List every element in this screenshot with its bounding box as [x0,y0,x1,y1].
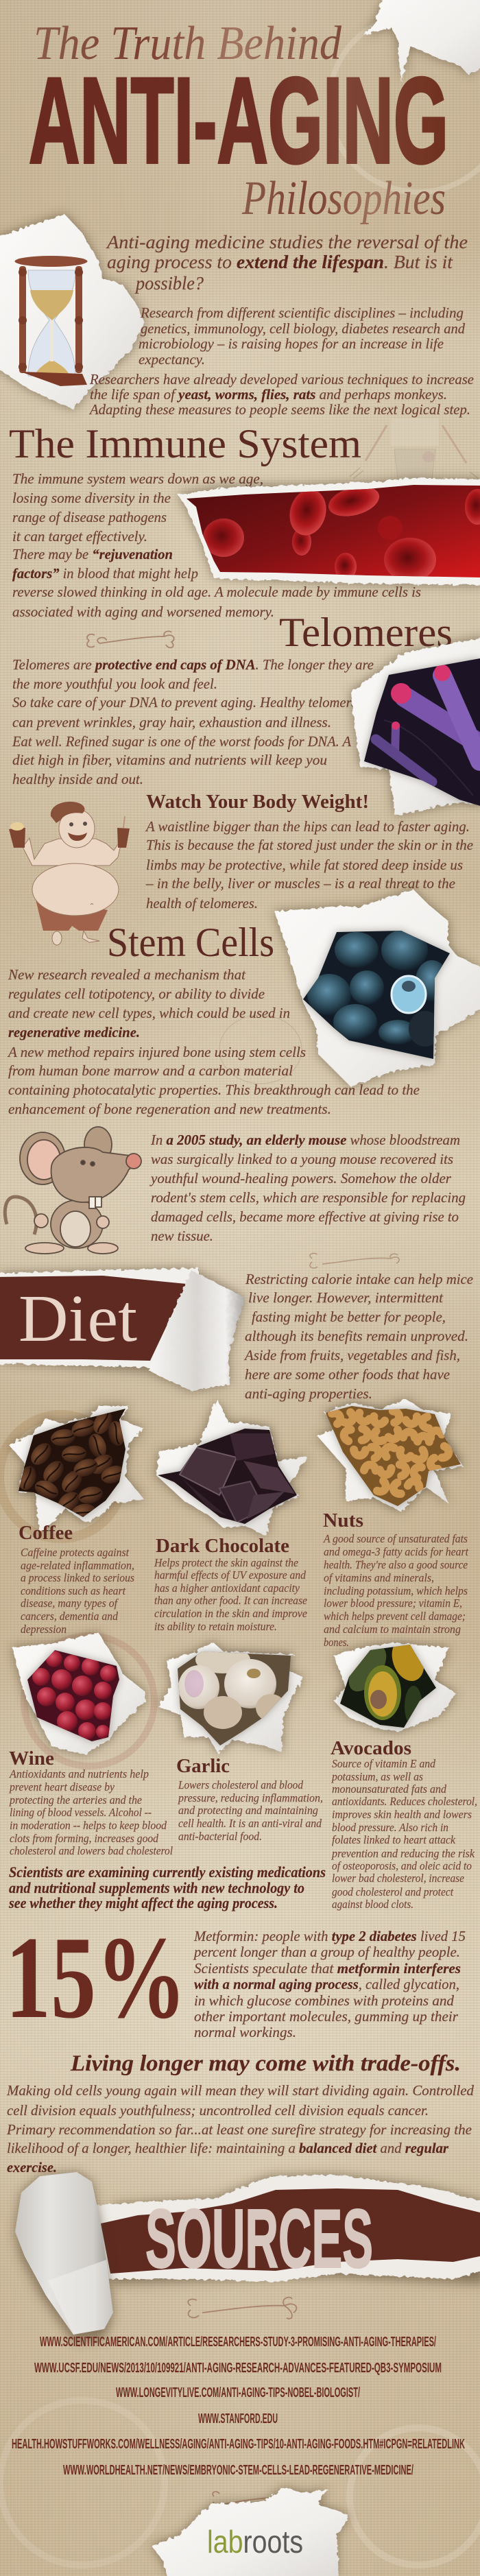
mouse study text: damaged cells, became more effective at giving rise to [151,1208,459,1225]
nuts text: of vitamins and minerals, [324,1571,434,1584]
stem cells text: from human bone marrow and a carbon material [8,1062,293,1079]
photo: dark chocolate [154,1399,308,1536]
panel: nuts [317,1399,469,1649]
diet intro text: fasting might be better for people, [252,1309,446,1325]
trade-offs text: cell division equals youthfulness; uncontrolled cell division equals cancer. [7,2102,429,2119]
avocados text: potassium, as well as [331,1770,423,1783]
stem cells text: containing photocatalytic properties. This breakthrough can lead to the [8,1082,420,1098]
body weight text: health of telomeres. [146,895,258,911]
nuts text: including potassium, which helps [324,1584,468,1597]
nuts text: and omega-3 fatty acids for heart [324,1545,469,1558]
coffee text: disease, many types of [21,1597,119,1610]
heading: Wine: Wine [9,1748,54,1769]
garlic text: and protecting and maintaining [178,1804,318,1817]
avocados text: blood pressure. Also rich in [332,1821,448,1834]
intro lead [106,232,468,294]
mouse study text: was surgically linked to a young mouse recovered its [151,1151,453,1167]
body weight text: limbs may be protective, while fat stored deep inside us [146,857,463,873]
mouse study text: rodent's stem cells, which are responsible for replacing [151,1189,466,1206]
immune system text: reverse slowed thinking in old age. A molecule made by immune cells is [12,584,421,600]
flourish [213,2492,274,2508]
nuts text: lower blood pressure; vitamin E, [324,1597,462,1610]
mouse study text: youthful wound-healing powers. Somehow the older [149,1170,452,1186]
photo: grapes [12,1632,145,1754]
telomeres text: Eat well. Refined sugar is one of the worst foods for DNA. A [12,733,351,750]
nuts text: bones. [324,1636,349,1649]
dark chocolate text: circulation in the skin and improve [154,1607,307,1620]
photo: avocados [334,1634,456,1732]
panel: wine [9,1632,173,1857]
panel: avocados [331,1634,477,1911]
diet intro text: here are some other foods that have [245,1366,450,1383]
trade-offs text: Primary recommendation so far...at least one surefire strategy for increasing the [6,2121,472,2138]
avocados text: against blood clots. [332,1898,413,1911]
dark chocolate text: Helps protect the skin against the [154,1556,298,1569]
trade-offs text: Making old cells young again will mean they will start dividing again. Controlled [6,2082,474,2099]
nuts text: and calcium to maintain strong [324,1623,461,1636]
heading: Living longer: Living longer may come with trade-offs. [70,2051,461,2076]
trade-offs text [6,2082,474,2175]
heading: Telomeres: Telomeres [279,610,453,655]
intro research paragraph: microbiology – is raising hopes for an increase in life [139,335,444,352]
coffee stain ring [0,1415,123,1538]
wine text: protecting the arteries and the [9,1793,142,1806]
source links [12,2335,465,2478]
dark chocolate text: harmful effects of UV exposure and [154,1569,306,1582]
garlic text: pressure, reducing inflammation, [178,1791,323,1804]
heading: Watch Your Body Weight: Watch Your Body Weight! [146,791,369,813]
body weight text [145,818,473,911]
torn strip: blood cells photo [178,478,480,585]
paper curl [148,1270,245,1391]
wine text: clots from forming, increases good [10,1832,158,1845]
panel: coffee [9,1406,144,1636]
heading: Diet: Diet [19,1282,137,1356]
immune system text: associated with aging and worsened memory. [12,604,274,620]
stem cells text: enhancement of bone regeneration and new treatments. [8,1101,331,1117]
flourish [87,631,174,647]
intro text [88,232,474,418]
immune system text: it can target effectively. [12,528,147,545]
garlic text: cell health. It is an anti-viral and [178,1817,322,1830]
avocados text: lower bad cholesterol, increase [332,1872,464,1885]
stem cells text: and create new cell types, which could be used in [8,1005,290,1021]
avocados text: Source of vitamin E and [332,1757,435,1770]
logo: labroots: labroots [207,2524,303,2560]
title line: The Truth Behind: The Truth Behind [34,17,342,70]
wine text: prevent heart disease by [9,1780,115,1793]
dark chocolate text: its ability to retain moisture. [154,1620,277,1633]
sources banner [15,2172,480,2341]
intro lead: Anti-aging medicine studies the reversal of the [106,232,468,252]
telomeres text: So take care of your DNA to prevent aging. Healthy telomeres [12,694,363,711]
trade-offs text: likelihood of a longer, healthier life: maintaining a balanced diet and regular [7,2140,449,2156]
callout: scientists examining: Scientists are examining currently existing medications [9,1863,326,1881]
telomeres text: diet high in fiber, vitamins and nutrients will keep you [12,752,327,768]
nuts text [323,1532,469,1649]
diet intro text: anti-aging properties. [245,1385,372,1402]
avocados text: folates linked to heart attack [332,1833,455,1846]
statistic: 15%: 15% [5,1913,187,2043]
avocados text: improves skin health and lowers [332,1808,472,1821]
coffee text: conditions such as heart [21,1584,126,1597]
heading: The Immune System: The Immune System [9,421,361,466]
avocados text: prevention and reducing the risk [331,1847,475,1860]
garlic text: Lowers cholesterol and blood [178,1778,303,1791]
metformin text: Metformin: people with type 2 diabetes lived 15 [193,1928,466,1944]
heading: Avocados: Avocados [331,1737,411,1759]
wine text: cholesterol and lowers bad cholesterol [10,1844,173,1857]
nuts text: health. They're also a good source [324,1558,468,1571]
heading: Dark Chocolate: Dark Chocolate [156,1535,289,1557]
heading: Coffee: Coffee [19,1522,73,1544]
telomeres text [12,656,374,787]
avocados text [331,1757,477,1911]
metformin text: normal workings. [194,2024,296,2040]
immune system text [12,470,421,620]
immune system text: factors” in blood that might help [12,565,198,582]
intro lead: aging process to extend the lifespan. But is it [107,252,454,272]
immune system text: There may be “rejuvenation [12,546,173,562]
flourish [310,1253,399,1268]
immune system text: The immune system wears down as we age, [12,470,263,487]
stem cells text: regenerative medicine. [8,1024,140,1040]
body weight section [9,791,473,945]
telomeres text: the more youthful you look and feel. [12,676,217,692]
callout: scientists examining: and nutritional supplements with new technology to [9,1879,304,1896]
illustration: mouse [5,1127,141,1254]
intro research paragraph: Research from different scientific disciplines – including [140,305,464,321]
intro techniques paragraph: Researchers have already developed various techniques to increase [89,371,474,387]
diet banner [0,1268,245,1391]
nuts text: A good source of unsaturated fats [323,1532,468,1545]
intro research paragraph [139,305,465,368]
icon: hourglass [15,256,88,386]
intro techniques paragraph [88,371,474,418]
avocados text: good cholesterol and protect [332,1885,454,1898]
title [29,17,448,225]
heading: Garlic: Garlic [176,1755,230,1777]
source links: WWW.STANFORD.EDU [198,2411,278,2426]
logo panel [152,2488,349,2576]
telomeres text: Telomeres are protective end caps of DNA. The longer they are [12,656,374,673]
heading: Nuts: Nuts [323,1510,363,1531]
metformin text: in which glucose combines with proteins and [194,1992,454,2009]
illustration: overweight man [9,802,130,945]
coffee text: Caffeine protects against [21,1546,130,1559]
immune system text: range of disease pathogens [12,509,167,525]
body weight text: This is because the fat stored just under the skin or in the [146,837,473,853]
trade-offs text: exercise. [7,2159,57,2175]
panel: dark chocolate [154,1399,308,1633]
stem cells text: regulates cell totipotency, or ability to divide [8,986,265,1002]
stem cells text: New research revealed a mechanism that [8,966,246,983]
metformin text: with a normal aging process, called glycation, [194,1976,459,1992]
callout: scientists examining: see whether they might affect the aging process. [8,1894,278,1911]
wine text: in moderation -- helps to keep blood [10,1819,167,1832]
diet intro text: Restricting calorie intake can help mice [245,1271,473,1287]
torn hole: chromosome photo [350,636,480,815]
dark chocolate text: has a higher antioxidant capacity [154,1582,300,1595]
garlic text [178,1778,323,1843]
torn hole: stem cells photo [274,890,480,1086]
photo: coffee beans [9,1406,144,1534]
stem cells text: A new method repairs injured bone using stem cells [7,1044,306,1060]
mouse study text: new tissue. [151,1228,213,1244]
faint skeleton sketch [350,418,479,480]
mouse study text [149,1132,466,1244]
photo: garlic [158,1642,303,1754]
mouse study text: In a 2005 study, an elderly mouse whose bloodstream [150,1132,460,1148]
intro research paragraph: expectancy. [139,351,205,368]
telomeres text: healthy inside and out. [12,771,143,787]
dark chocolate text [154,1556,307,1633]
callout: scientists examining [8,1863,326,1911]
nuts text: which helps prevent cell damage; [324,1610,466,1623]
metformin text: percent longer than a group of healthy people. [193,1944,460,1960]
intro techniques paragraph: Adapting these measures to people seems like the next logical step. [88,401,470,418]
coffee text: depression [21,1623,67,1636]
coffee text [21,1546,134,1636]
wine text [9,1767,173,1857]
heading: Stem Cells: Stem Cells [107,920,274,965]
paper roll [15,2172,113,2341]
avocados text: monounsaturated fats and [332,1782,446,1796]
body weight text: A waistline bigger than the hips can lead to faster aging. [145,818,470,835]
coffee text: cancers, dementia and [21,1610,118,1623]
torn hole with hourglass [0,214,144,409]
metformin text [193,1928,466,2040]
coffee text: a process linked to serious [21,1571,134,1584]
intro lead: possible? [134,273,204,294]
diet intro text [243,1271,473,1402]
coffee text: age-related inflammation, [21,1559,134,1572]
dark chocolate text: than any other food. It can increase [154,1594,307,1607]
wine text: lining of blood vessels. Alcohol -- [10,1806,152,1819]
metformin text: Scientists speculate that metformin interferes [194,1960,461,1977]
garlic text: anti-bacterial food. [178,1830,262,1843]
intro research paragraph: genetics, immunology, cell biology, diabetes research and [141,320,465,337]
telomeres text: can prevent wrinkles, gray hair, exhaustion and illness. [12,714,331,730]
torn corner top right [364,0,480,82]
panel: garlic [158,1642,323,1843]
diet intro text: live longer. However, intermittent [248,1289,444,1306]
metformin text: other important molecules, gumming up their [194,2008,459,2025]
body weight text: – in the belly, liver or muscles – is a real threat to the [145,875,455,892]
diet intro text: although its benefits remain unproved. [245,1328,468,1344]
photo: nuts [317,1399,463,1512]
diet intro text: Aside from fruits, vegetables and fish, [243,1347,460,1363]
intro techniques paragraph: the life span of yeast, worms, flies, rats and perhaps monkeys. [90,386,447,403]
immune system text: losing some diversity in the [12,490,171,506]
stem cells text [7,966,420,1117]
wine stain ring [24,1636,154,1766]
flourish [188,2298,296,2319]
wine text: Antioxidants and nutrients help [9,1767,149,1780]
